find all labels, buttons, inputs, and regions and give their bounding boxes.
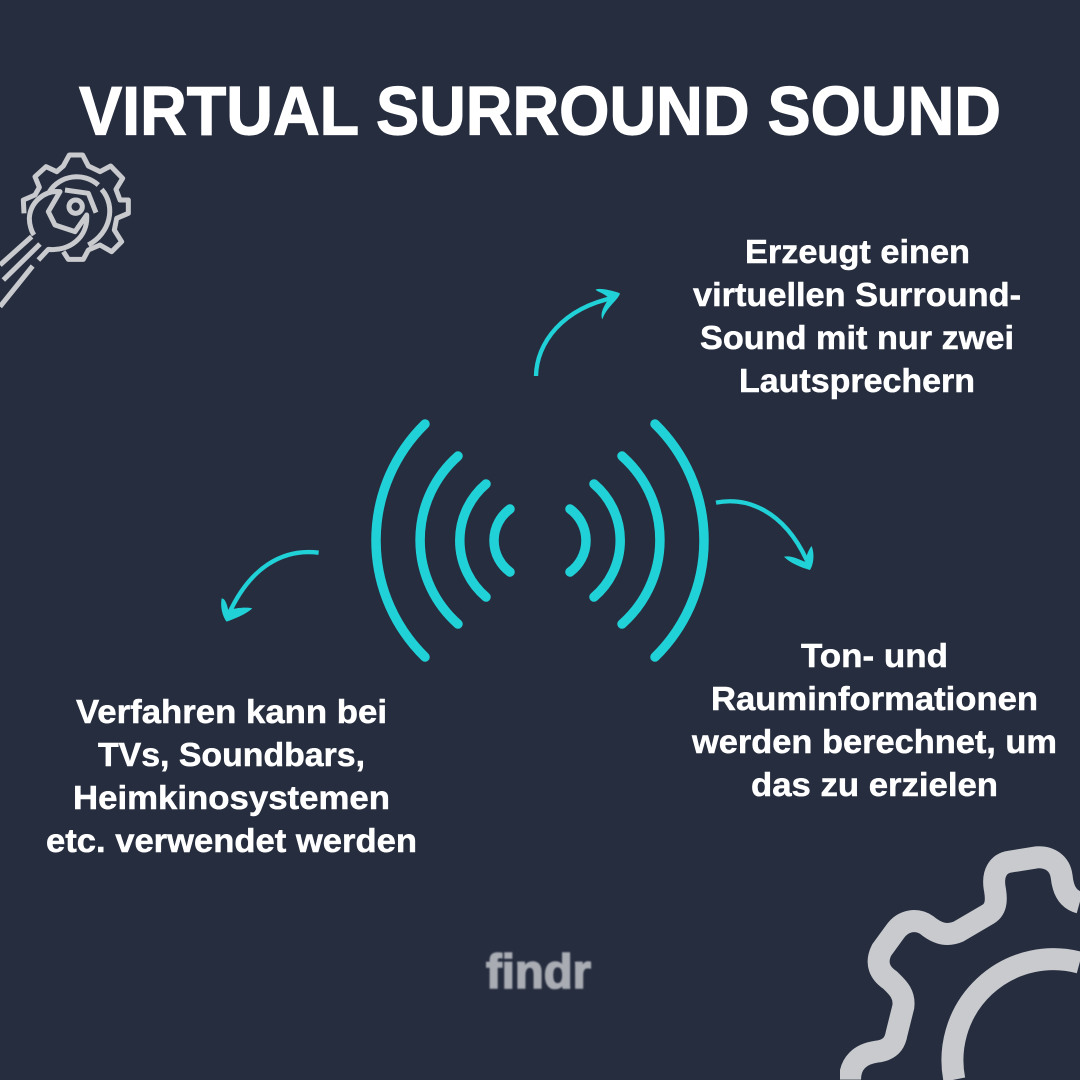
icon: gear with wrench bbox=[0, 152, 131, 308]
text: top right: Lautsprechern bbox=[739, 362, 975, 399]
arrow: up to top-right text bbox=[536, 289, 620, 376]
text: bottom right: werden berechnet, um bbox=[691, 723, 1057, 760]
text: bottom right bbox=[691, 637, 1057, 803]
icon: large gear corner bbox=[840, 846, 1080, 1080]
right waves bbox=[570, 424, 704, 657]
sound waves icon bbox=[376, 424, 704, 657]
logo: findr: findr bbox=[486, 946, 591, 999]
text: bottom left: etc. verwendet werden bbox=[46, 822, 417, 859]
title: VIRTUAL SURROUND SOUND bbox=[79, 72, 1001, 150]
text: bottom left: Verfahren kann bei bbox=[76, 693, 387, 730]
text: bottom left: TVs, Soundbars, bbox=[98, 736, 365, 773]
text: top right bbox=[693, 233, 1021, 399]
arrow: left to bottom-left text bbox=[221, 552, 319, 622]
text: bottom right: Ton- und bbox=[801, 637, 948, 674]
text: bottom right: Rauminformationen bbox=[711, 680, 1038, 717]
text: top right: Sound mit nur zwei bbox=[700, 319, 1014, 356]
arrow: right to bottom-right text bbox=[716, 501, 813, 570]
text: bottom left: Heimkinosystemen bbox=[73, 779, 390, 816]
left waves bbox=[376, 424, 510, 657]
text: top right: virtuellen Surround- bbox=[693, 276, 1021, 313]
text: bottom left bbox=[46, 693, 417, 859]
text: bottom right: das zu erzielen bbox=[751, 766, 998, 803]
text: top right: Erzeugt einen bbox=[745, 233, 970, 270]
